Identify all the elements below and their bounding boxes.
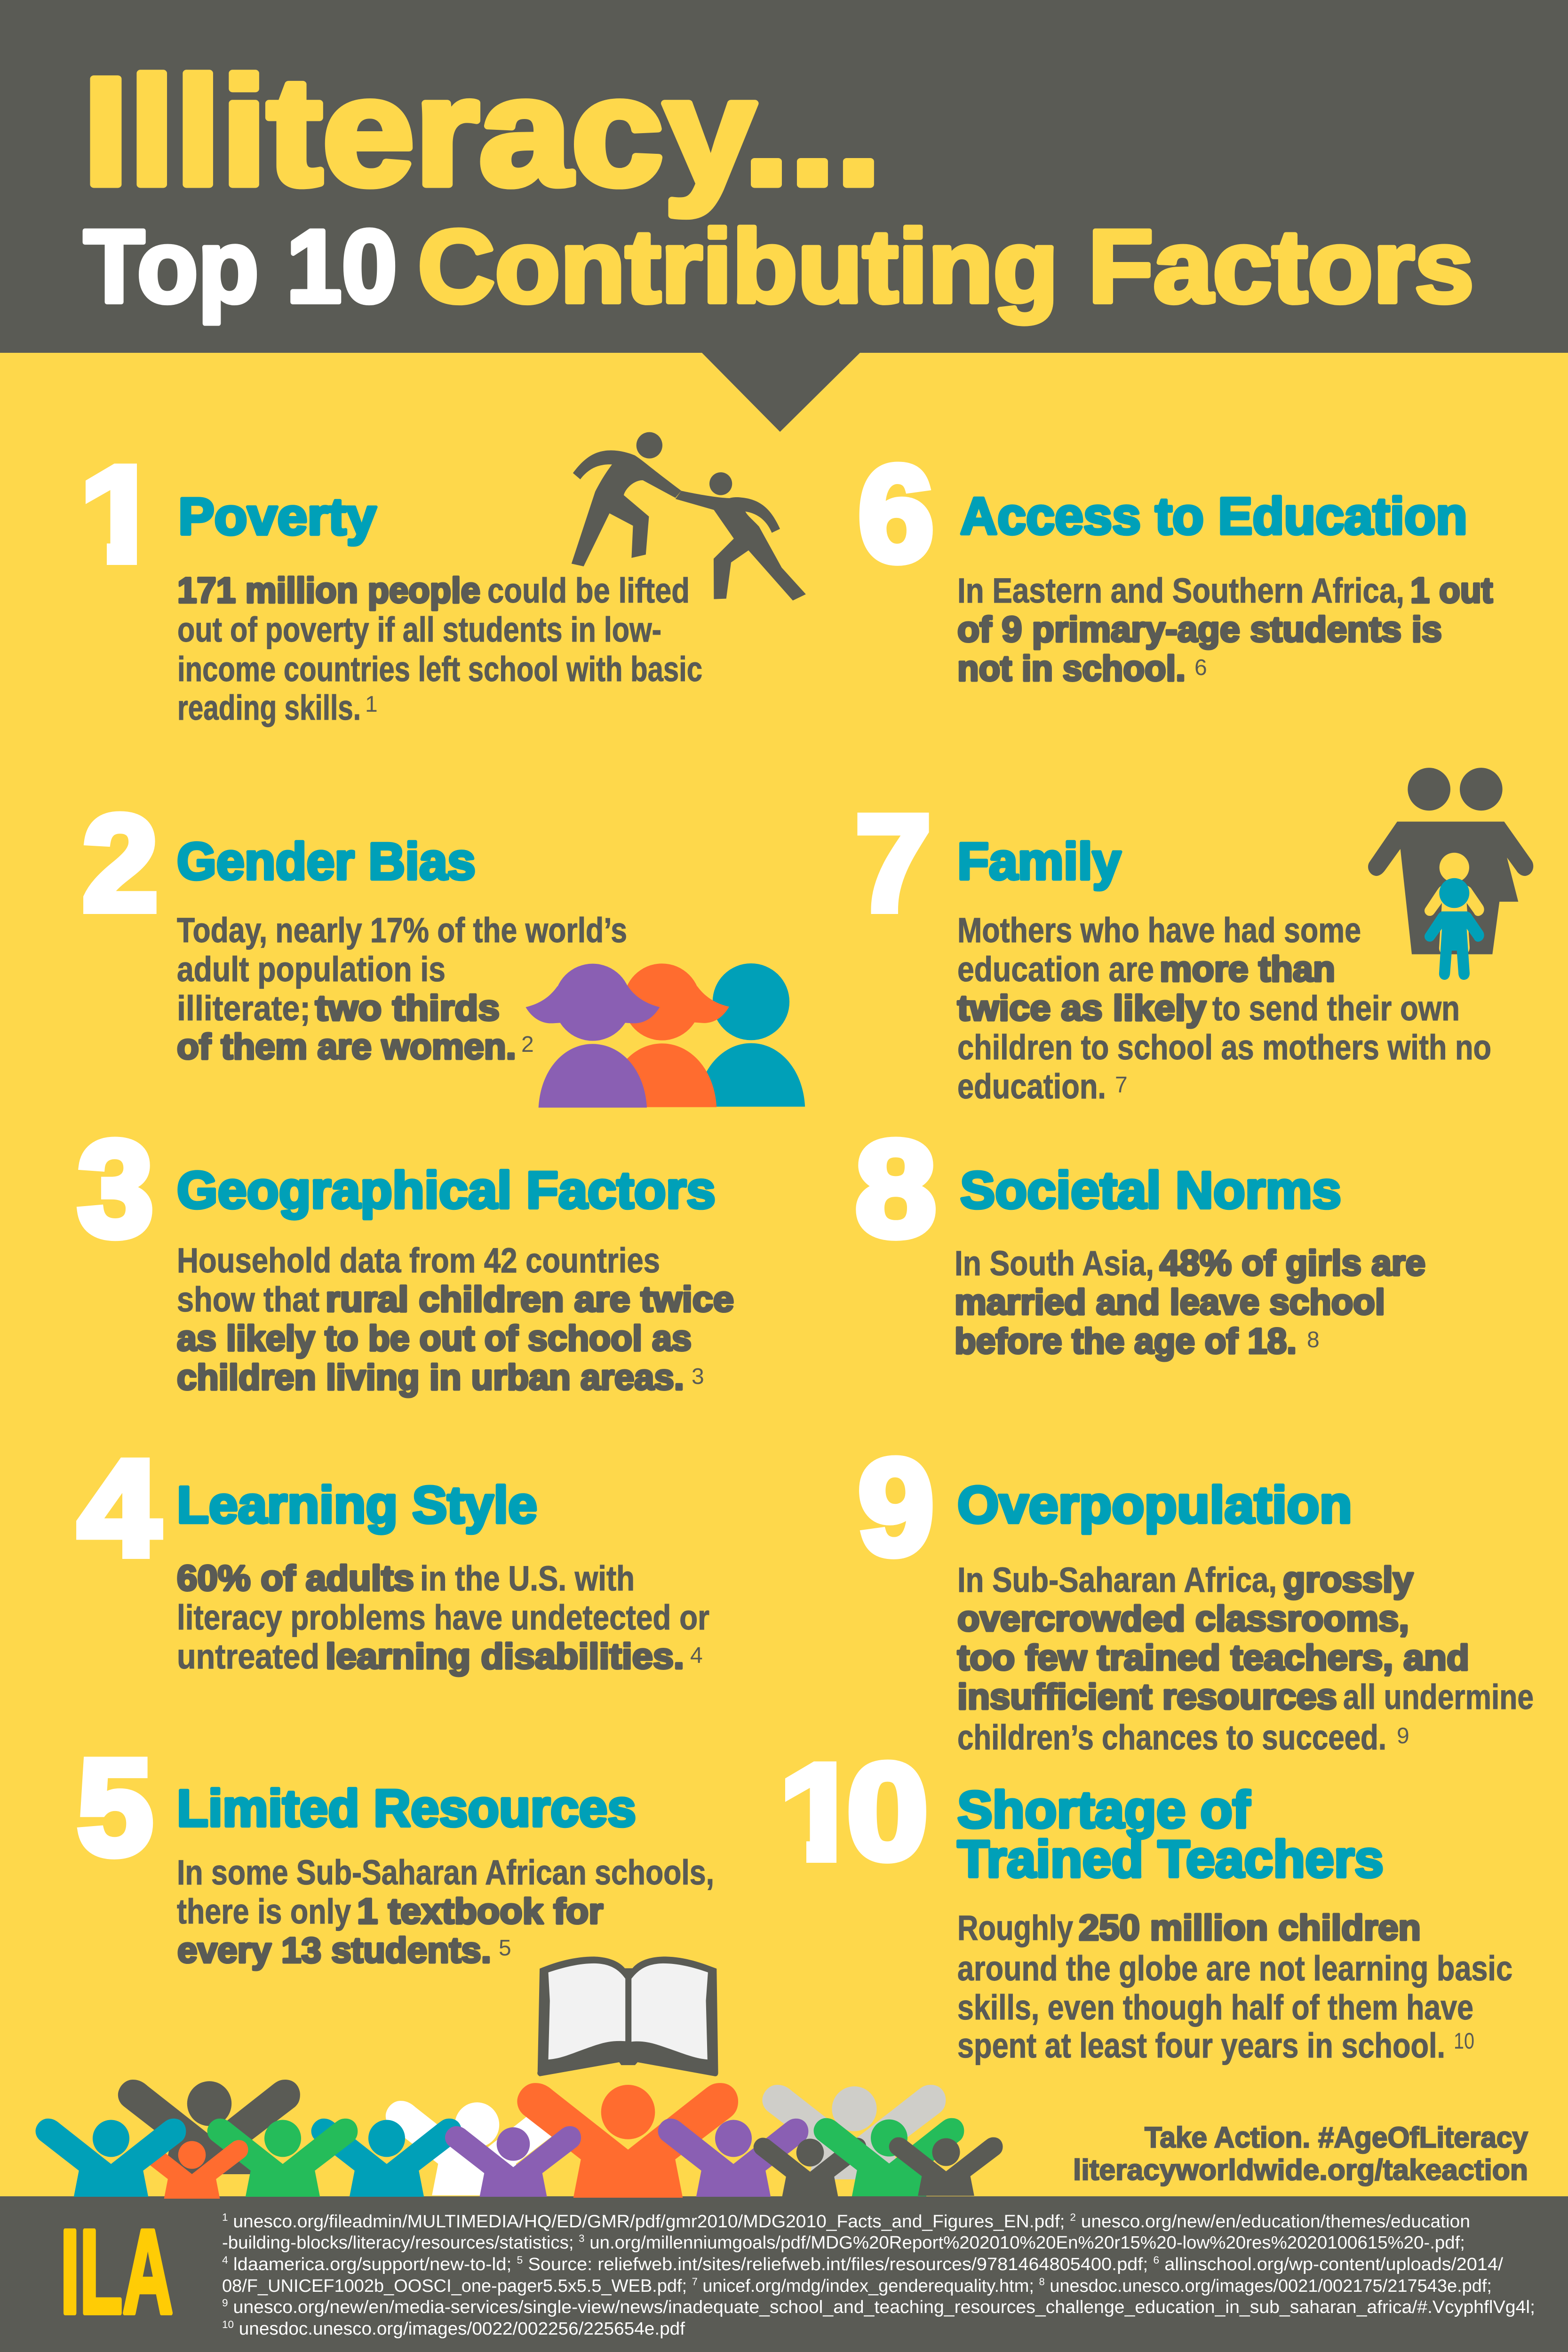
panel: 7 family (855, 768, 1533, 1106)
panel: 8 societal norms (855, 1112, 1425, 1361)
text: learning style: 60% of adults (177, 1558, 414, 1598)
number 7: 7 (855, 787, 931, 939)
footnotes: 08/F_UNICEF1002b_OOSCI_one-pager5.5x5.5_WEB.pdf; (222, 2276, 687, 2296)
text: limited resources: 5 (499, 1936, 511, 1961)
footnotes: unesco.org/fileadmin/MULTIMEDIA/HQ/ED/GMR/pdf/gmr2010/MDG2010_Facts_and_Figures_EN.pdf; (228, 2212, 1070, 2232)
footnotes: 2 (1070, 2211, 1076, 2223)
logo: ILA: ILA (60, 2205, 173, 2338)
text: family: education are (957, 950, 1154, 989)
footnotes: unesco.org/new/en/media-services/single-view/news/inadequate_school_and_teaching_resources_challenge_education_in_sub_saharan_africa/#.VcyphflVg4l; (228, 2297, 1535, 2317)
text: gender bias (177, 911, 627, 1067)
text: geographical factors: children living in urban areas. (177, 1358, 684, 1398)
number 10: 1 (779, 1736, 862, 1888)
text: family: children to school as mothers with no (957, 1028, 1491, 1067)
text: learning style: 4 (690, 1643, 703, 1668)
text: learning style: learning disabilities. (326, 1637, 684, 1677)
text: poverty: 1 (365, 692, 378, 717)
text: shortage of trained teachers: Roughly (957, 1908, 1073, 1947)
text: shortage of trained teachers: spent at least four years in school. (957, 2026, 1445, 2065)
footnotes: 7 (692, 2276, 698, 2288)
number 4: 4 (78, 1432, 161, 1584)
footnotes: 8 (1039, 2276, 1045, 2288)
text: gender bias: Today, nearly 17% of the world’s (177, 911, 627, 950)
text: overpopulation: overcrowded classrooms, (957, 1599, 1409, 1639)
footnotes: 9 (222, 2297, 228, 2309)
text: poverty (177, 571, 702, 727)
text: poverty: could be lifted (487, 571, 690, 610)
heading: poverty: Poverty (178, 488, 376, 546)
text: shortage of trained teachers: 10 (1454, 2029, 1474, 2054)
text: overpopulation: grossly (1283, 1560, 1413, 1600)
heading: shortage of trained teachers: Shortage of (957, 1781, 1250, 1839)
text: overpopulation: all undermine (1343, 1677, 1534, 1716)
text: poverty: reading skills. (177, 688, 361, 727)
number 5: 5 (77, 1731, 153, 1883)
text: access to education: 6 (1194, 655, 1207, 680)
text: access to education: of 9 primary-age students is (957, 610, 1442, 650)
text: overpopulation: insufficient resources (957, 1677, 1337, 1717)
text: geographical factors: Household data from 42 countries (177, 1241, 660, 1280)
heading: societal norms: Societal Norms (960, 1161, 1341, 1219)
text: limited resources: In some Sub-Saharan African schools, (177, 1853, 714, 1892)
text: family: Mothers who have had some (957, 911, 1361, 950)
text: shortage of trained teachers: 250 million children (1079, 1908, 1421, 1948)
panel: 6 access to education (858, 437, 1493, 689)
text: geographical factors: 3 (692, 1364, 704, 1389)
panel: 10 shortage of trained teachers (779, 1735, 1512, 2065)
text: learning style: in the U.S. with (420, 1559, 635, 1598)
number 10: 0 (847, 1735, 928, 1888)
footnotes: 3 (579, 2233, 585, 2244)
call to action: Take Action. #AgeOfLiteracy (1145, 2122, 1528, 2154)
panel: 5 limited resources (77, 1731, 714, 1971)
icon: three people (525, 963, 805, 1108)
heading: access to education: Access to Education (960, 487, 1467, 545)
footnotes: 10 (222, 2319, 234, 2330)
footnotes: unicef.org/mdg/index_genderequality.htm; (698, 2276, 1039, 2296)
text: overpopulation: 9 (1397, 1724, 1409, 1748)
text: societal norms: In South Asia, (955, 1244, 1154, 1283)
text: overpopulation: children’s chances to succeed. (957, 1718, 1386, 1757)
panel: 9 overpopulation (858, 1431, 1534, 1757)
icon: parents and child (1368, 768, 1533, 980)
text: learning style: literacy problems have undetected or (177, 1598, 709, 1637)
number 1: 1 (80, 438, 163, 590)
footnotes: un.org/millenniumgoals/pdf/MDG%20Report%202010%20En%20r15%20-low%20res%2020100615%20-.pdf; (585, 2233, 1465, 2253)
text: gender bias: two thirds (315, 988, 500, 1028)
icon: open book (537, 1956, 718, 2076)
text: access to education: 1 out (1410, 571, 1493, 611)
heading: geographical factors: Geographical Factors (177, 1161, 716, 1219)
header band (0, 0, 1568, 432)
text: family: to send their own (1212, 989, 1460, 1028)
footnotes: allinschool.org/wp-content/uploads/2014/ (1159, 2255, 1503, 2274)
text: family: education. (957, 1067, 1106, 1106)
footnotes (222, 2211, 1535, 2339)
text: overpopulation (957, 1560, 1534, 1757)
text: poverty: 171 million people (177, 571, 480, 611)
text: shortage of trained teachers: skills, even though half of them have (957, 1988, 1473, 2027)
number 9: 9 (858, 1431, 934, 1583)
text: overpopulation: In Sub-Saharan Africa, (957, 1560, 1277, 1599)
text: societal norms (955, 1243, 1425, 1361)
text: access to education (957, 571, 1493, 689)
text: geographical factors: rural children are twice (326, 1279, 734, 1319)
text: gender bias: of them are women. (177, 1027, 516, 1067)
text: geographical factors (177, 1241, 734, 1398)
text: societal norms: before the age of 18. (955, 1321, 1297, 1361)
text: limited resources: every 13 students. (177, 1931, 491, 1971)
text: gender bias: adult population is (177, 950, 446, 989)
heading: learning style: Learning Style (177, 1476, 537, 1534)
number 8: 8 (855, 1112, 936, 1265)
text: gender bias: 2 (521, 1032, 534, 1057)
heading: gender bias: Gender Bias (177, 833, 476, 890)
heading: limited resources: Limited Resources (177, 1780, 636, 1837)
heading: shortage of trained teachers (957, 1781, 1384, 1888)
text: family: twice as likely (957, 988, 1206, 1028)
text: limited resources: there is only (177, 1892, 351, 1931)
text: family: 7 (1115, 1073, 1128, 1097)
text: limited resources (177, 1853, 714, 1971)
footnotes: 1 (222, 2211, 228, 2223)
heading: family: Family (957, 833, 1121, 890)
number 6: 6 (858, 437, 934, 590)
text: family (957, 911, 1491, 1106)
title: Illiteracy... (83, 46, 882, 218)
title (83, 46, 1474, 324)
footnotes: 6 (1153, 2254, 1159, 2266)
text: poverty: out of poverty if all students in low- (177, 610, 661, 649)
number 3: 3 (78, 1112, 153, 1265)
text: geographical factors: show that (177, 1280, 319, 1319)
call to action: literacyworldwide.org/takeaction (1073, 2154, 1528, 2186)
footnotes: unesdoc.unesco.org/images/0022/002256/225654e.pdf (234, 2319, 685, 2339)
text: limited resources: 1 textbook for (357, 1891, 603, 1931)
text: access to education: not in school. (957, 649, 1186, 689)
panel: 2 gender bias (82, 787, 805, 1108)
panel: 4 learning style (78, 1432, 709, 1677)
text: learning style: untreated (177, 1637, 319, 1676)
footnotes: ldaamerica.org/support/new-to-ld; (228, 2255, 517, 2274)
icon: helping hand figures (572, 432, 806, 601)
crowd of raised-arm figures (36, 2080, 1003, 2199)
subtitle: Top 10 (84, 208, 397, 324)
text: family: more than (1160, 949, 1335, 989)
text: poverty: income countries left school with basic (177, 650, 702, 689)
text: shortage of trained teachers (957, 1908, 1512, 2065)
text: learning style (177, 1558, 709, 1677)
call to action (1073, 2122, 1528, 2186)
heading: overpopulation: Overpopulation (957, 1476, 1352, 1534)
footnotes: 5 (517, 2254, 523, 2266)
panel: 1 poverty (80, 432, 806, 727)
footer band (0, 2196, 1568, 2352)
footnotes: -building-blocks/literacy/resources/statistics; (222, 2233, 570, 2253)
footnotes: 4 (222, 2254, 228, 2266)
footnotes: Source: reliefweb.int/sites/reliefweb.int/files/resources/9781464805400.pdf; (523, 2255, 1153, 2274)
panel: 3 geographical factors (78, 1112, 734, 1398)
footnotes: unesco.org/new/en/education/themes/education (1076, 2212, 1470, 2232)
footnotes: unesdoc.unesco.org/images/0021/002175/217543e.pdf; (1045, 2276, 1492, 2296)
number 2: 2 (82, 787, 158, 939)
text: overpopulation: too few trained teachers, and (957, 1638, 1469, 1678)
text: access to education: In Eastern and Southern Africa, (957, 571, 1404, 610)
text: geographical factors: as likely to be out of school as (177, 1319, 692, 1359)
heading: shortage of trained teachers: Trained Teachers (957, 1830, 1384, 1888)
text: societal norms: 8 (1307, 1327, 1320, 1352)
text: societal norms: 48% of girls are (1160, 1243, 1425, 1283)
text: societal norms: married and leave school (955, 1282, 1385, 1322)
subtitle: Contributing Factors (418, 208, 1474, 324)
number 10 (785, 1759, 926, 1864)
text: gender bias: illiterate; (177, 989, 310, 1028)
